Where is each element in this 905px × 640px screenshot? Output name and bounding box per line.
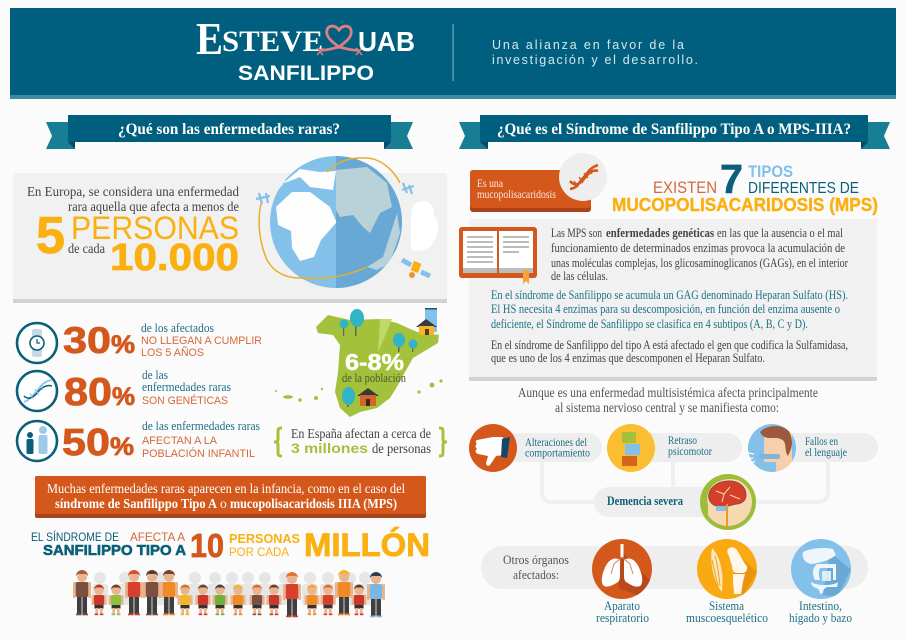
- tagline: [492, 38, 698, 67]
- text: MPS definition: en las que la ausencia o el mal: [717, 226, 844, 240]
- symptom: demencia severa: [594, 474, 756, 530]
- icon: lungs: [592, 539, 652, 599]
- panel: explanation: [459, 219, 877, 381]
- tag: es una mucopolisacaridosis: [470, 153, 607, 212]
- panel: otros organos afectados: Otros órganos: [503, 552, 569, 567]
- stat: 30%: de los afectados: [141, 320, 214, 335]
- heading: existen 7 tipos: DIFERENTES DE: [748, 180, 859, 197]
- cloud: [411, 201, 438, 251]
- panel: definition in Europe: [13, 150, 447, 303]
- symptom: demencia severa: Demencia severa: [607, 494, 684, 508]
- text: MPS definition: de las células.: [551, 269, 608, 283]
- organ: sistema muscoesqueletico: Sistema: [709, 598, 744, 613]
- stat: 5 personas de cada 10.000: de cada: [68, 241, 105, 256]
- callout: 3 millones: [274, 426, 447, 456]
- stat: 10 personas por cada millón: AFECTA A: [130, 530, 185, 544]
- icon: DNA badge: [559, 153, 607, 201]
- map of Spain: de la población: [342, 371, 407, 385]
- icon: blocks: [607, 424, 655, 472]
- text: heparan sulfato: El HS necesita 4 enzimas para su descomposición, en función del enzima ausente o: [491, 302, 840, 316]
- stat: 50%: POBLACIÓN INFANTIL: [142, 447, 255, 460]
- text: MPS definition: unas moléculas complejas, los glicosaminoglicanos (GAGs), en el interior: [551, 256, 848, 270]
- text: definition: [27, 184, 239, 214]
- symptom: alteraciones del comportamiento: Alteraciones del: [525, 435, 588, 449]
- stat: 50%: 50: [62, 422, 110, 464]
- text: definition: En Europa, se considera una enfermedad: [27, 184, 239, 199]
- orange banner: infancia: Muchas enfermedades raras aparecen en la infancia, como en el caso del: [47, 481, 405, 496]
- text: tipo A: [491, 338, 848, 365]
- callout: 3 millones: En España afectan a cerca de: [291, 426, 431, 441]
- logo: Esteve UAB: [196, 13, 415, 64]
- tag: es una mucopolisacaridosis: Es una: [477, 178, 503, 190]
- icon: trees north: [340, 309, 418, 352]
- organ: sistema muscoesqueletico: muscoesquelético: [686, 610, 768, 625]
- symptom: alteraciones del comportamiento: [469, 424, 602, 472]
- stat: 5 personas de cada 10.000: 5: [36, 207, 65, 265]
- text: manifestaciones intro: Aunque es una enfermedad multisistémica afecta principalmente: [518, 385, 818, 400]
- ribbon heading: enfermedades raras: [46, 115, 413, 149]
- globe: [256, 156, 414, 288]
- stat: 80%: 80: [64, 371, 112, 414]
- icon: thumb down: [469, 424, 517, 472]
- stat: 80%: enfermedades raras: [142, 379, 231, 394]
- callout: 3 millones: 3 millones: [291, 440, 368, 456]
- logo subtitle: SANFILIPPO: [238, 62, 374, 85]
- text: MPS definition: Las MPS son: [551, 226, 602, 240]
- panel: otros organos afectados: afectados:: [513, 567, 559, 582]
- stat: 80%: SON GENÉTICAS: [142, 394, 228, 407]
- stat: 5 personas de cada 10.000: 10.000: [110, 237, 239, 279]
- heading: existen 7 tipos: MUCOPOLISACARIDOSIS (MPS): [612, 195, 878, 215]
- stat: 10 personas por cada millón: EL SÍNDROME DE: [31, 529, 119, 544]
- icon: muscle and knee: [697, 539, 757, 599]
- icon: open book: [459, 227, 537, 284]
- organ: aparato respiratorio: respiratorio: [596, 610, 649, 625]
- icon: digestive organs: [791, 539, 851, 599]
- stat: 10 personas por cada millón: MILLÓN: [304, 527, 430, 563]
- logo: Esteve UAB: E: [196, 13, 223, 64]
- stat: 5 personas de cada 10.000: [36, 207, 239, 279]
- logo: Esteve UAB: STEVE: [222, 25, 323, 58]
- icon: face: [747, 424, 796, 472]
- icon: house north: [416, 319, 437, 335]
- text: MPS definition: enfermedades genéticas: [606, 226, 714, 240]
- heading: existen 7 tipos: EXISTEN: [653, 179, 717, 197]
- orange banner: infancia: [35, 476, 426, 518]
- text: heparan sulfato: En el síndrome de Sanfilippo se acumula un GAG denominado Heparan Sulfato (HS).: [491, 288, 848, 302]
- stat: 30%: NO LLEGAN A CUMPLIR: [141, 335, 262, 347]
- tagline: Una alianza en favor de la: [492, 38, 684, 52]
- text: MPS definition: [551, 226, 848, 283]
- stat: 80%: %: [112, 383, 135, 411]
- text: heparan sulfato: [491, 288, 848, 331]
- text: definition: rara aquella que afecta a menos de: [68, 199, 239, 214]
- text: MPS definition: funcionamiento de determinados enzimas provoca la acumulación de: [551, 241, 845, 255]
- orange banner: infancia: síndrome de Sanfilippo Tipo A: [55, 496, 217, 511]
- stat: 80%: de las: [142, 367, 168, 382]
- organ: aparato respiratorio: [592, 539, 652, 625]
- symptom: retraso psicomotor: psicomotor: [668, 444, 712, 458]
- icon: plane right: [402, 183, 414, 194]
- organ: intestino, higado y bazo: hígado y bazo: [789, 610, 852, 625]
- organ: intestino, higado y bazo: [789, 539, 852, 625]
- heading: existen 7 tipos: [612, 156, 878, 215]
- heading: existen 7 tipos: TIPOS: [748, 162, 793, 181]
- stat: 50%: [17, 418, 260, 464]
- symptom: fallos en el lenguaje: Fallos en: [805, 434, 838, 448]
- stat: 50%: de las enfermedades raras: [142, 418, 260, 433]
- stat: 30%: %: [111, 331, 135, 359]
- text: tipo A: que es uno de los 4 enzimas que descomponen el Heparan Sulfato.: [491, 351, 765, 365]
- map islands: [275, 379, 443, 402]
- ribbon heading: síndrome de Sanfilippo: ¿Qué es el Síndrome de Sanfilippo Tipo A o MPS-IIIA?: [497, 121, 851, 138]
- stat: 10 personas por cada millón: [31, 527, 430, 564]
- stat: 10 personas por cada millón: SANFILIPPO TIPO A: [43, 542, 186, 559]
- stat: 80%: [17, 367, 231, 414]
- stat: 30%: 30: [63, 320, 111, 361]
- map of Spain: [275, 308, 443, 417]
- orange banner: infancia: o: [220, 496, 227, 511]
- heading: existen 7 tipos: 7: [720, 156, 743, 202]
- stat: 5 personas de cada 10.000: PERSONAS: [71, 210, 239, 246]
- stat: 30%: [17, 320, 262, 363]
- icon: DNA: [17, 371, 57, 411]
- panel: otros organos afectados: [481, 546, 868, 589]
- icon: plane left: [256, 193, 270, 204]
- symptom: alteraciones del comportamiento: comportamiento: [525, 446, 590, 460]
- ribbon heading: enfermedades raras: ¿Qué son las enfermedades raras?: [118, 121, 340, 138]
- stat: 30%: LOS 5 AÑOS: [141, 346, 204, 359]
- stat: 10 personas por cada millón: PERSONAS: [229, 532, 300, 546]
- header band: [10, 8, 896, 99]
- organ: aparato respiratorio: Aparato: [604, 598, 640, 613]
- callout: 3 millones: de personas: [372, 441, 431, 456]
- ribbon heading: síndrome de Sanfilippo: [459, 115, 890, 149]
- illustration: crowd of people: [73, 570, 385, 617]
- icon: watch: [17, 323, 57, 363]
- icon: brain: [700, 474, 756, 530]
- symptom: fallos en el lenguaje: el lenguaje: [805, 445, 847, 459]
- orange banner: infancia: mucopolisacaridosis IIIA (MPS): [230, 496, 397, 511]
- icon: children: [17, 421, 57, 461]
- logo: Esteve UAB: UAB: [358, 26, 415, 57]
- icon: tree south: [342, 387, 355, 407]
- stat: 10 personas por cada millón: 10: [190, 527, 224, 564]
- tagline: investigación y el desarrollo.: [492, 53, 698, 67]
- icon: house south: [357, 388, 379, 406]
- text: heparan sulfato: deficiente, el Síndrome de Sanfilippo se clasifica en 4 subtipos (A, B, C y D).: [491, 317, 808, 331]
- connector lines: [542, 460, 828, 502]
- stat: 50%: %: [110, 433, 134, 461]
- stat: 50%: AFECTAN A LA: [142, 435, 218, 447]
- text: manifestaciones intro: [518, 385, 818, 415]
- icon: satellite: [402, 260, 430, 278]
- tag: es una mucopolisacaridosis: mucopolisacaridosis: [477, 189, 556, 201]
- text: manifestaciones intro: al sistema nervioso central y se manifiesta como:: [555, 400, 779, 415]
- symptom: retraso psicomotor: [607, 424, 742, 472]
- stat: 10 personas por cada millón: POR CADA: [229, 545, 289, 559]
- symptom: retraso psicomotor: Retraso: [668, 433, 697, 447]
- symptom: fallos en el lenguaje: [747, 424, 878, 472]
- organ: intestino, higado y bazo: Intestino,: [799, 598, 842, 613]
- map of Spain: 6-8%: [345, 349, 404, 375]
- organ: sistema muscoesqueletico: [686, 539, 768, 625]
